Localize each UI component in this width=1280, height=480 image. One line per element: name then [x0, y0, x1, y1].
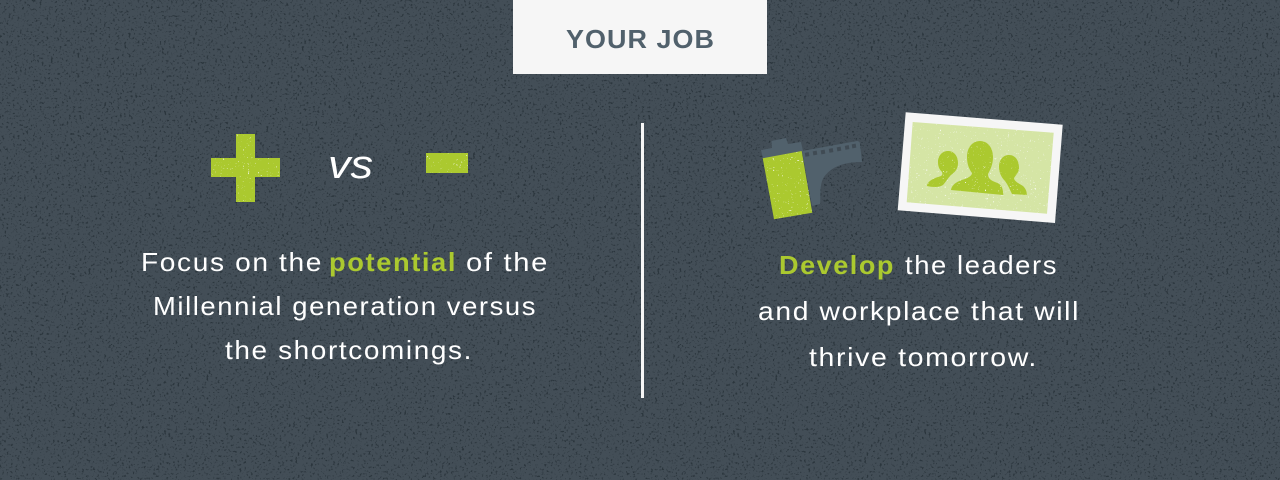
right text block: thrive tomorrow. [809, 342, 1038, 372]
divider [641, 123, 644, 398]
left text block: Focus on the [141, 247, 323, 277]
vs label: vs [328, 143, 373, 187]
icon: film roll [761, 138, 862, 219]
icon: plus [211, 134, 280, 202]
right text block: Develop [779, 250, 895, 280]
left text block: potential [329, 247, 457, 277]
icon: minus [426, 153, 468, 173]
left text block: the shortcomings. [225, 335, 473, 365]
left text block: of the [466, 247, 549, 277]
icon: photo of people [898, 112, 1063, 223]
left text block [141, 247, 549, 365]
panel: develop [758, 112, 1080, 372]
left text block: Millennial generation versus [153, 291, 537, 321]
right text block: the leaders [905, 250, 1058, 280]
title text: YOUR JOB [566, 24, 715, 54]
right text block [758, 250, 1080, 372]
panel: potential [141, 134, 549, 365]
title tab [513, 0, 767, 74]
people silhouettes [927, 141, 1027, 195]
right text block: and workplace that will [758, 296, 1080, 326]
